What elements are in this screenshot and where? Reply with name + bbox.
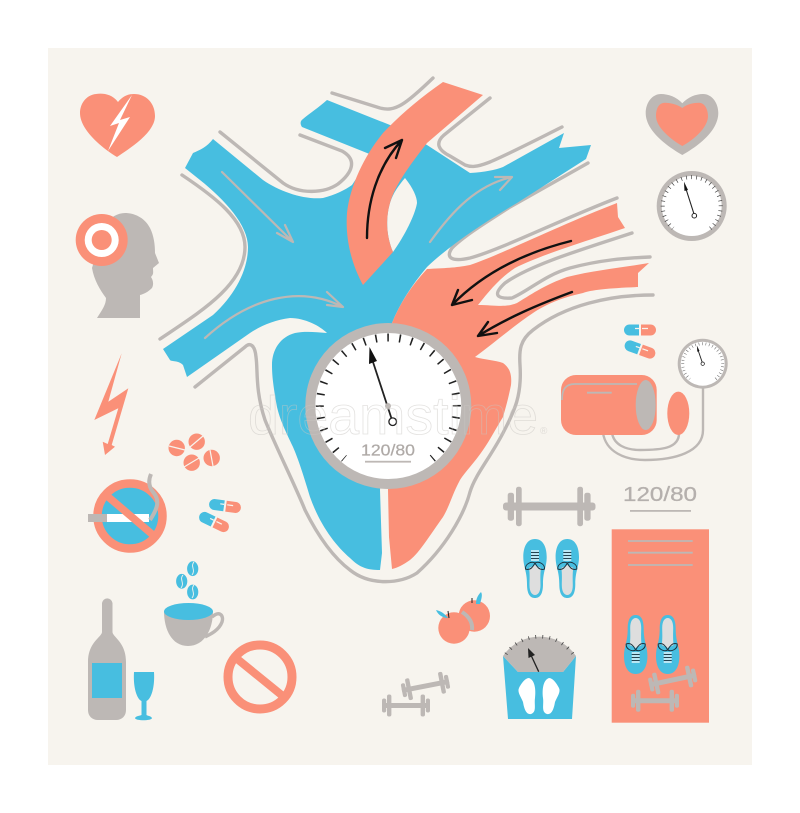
- icon: apples: [436, 592, 490, 644]
- heart diagram: [160, 78, 653, 582]
- icon: capsules right: [623, 324, 657, 360]
- watermark: dreamstime: [248, 386, 538, 446]
- icon: running shoes: [523, 539, 579, 598]
- icon: healthy heart: [646, 94, 718, 155]
- cuff gauge: [678, 339, 728, 389]
- icon: wine bottle: [88, 598, 126, 720]
- heading: 120/80 reading: [623, 484, 697, 512]
- pump bulb: [667, 392, 689, 435]
- icon: wine glass: [134, 672, 154, 720]
- icon: round pills: [168, 434, 220, 471]
- panel: orange exercise card: [612, 529, 709, 723]
- gauge needle: [369, 347, 397, 426]
- central pressure gauge: [305, 323, 471, 489]
- grey flow arrows: [205, 172, 512, 338]
- background panel: [48, 48, 752, 765]
- orange aortic arch: [347, 82, 483, 285]
- gauge reading: 120/80: [361, 442, 415, 460]
- icon: capsules left: [197, 498, 242, 534]
- footprints: [518, 678, 560, 714]
- icon: blood pressure cuff: [561, 339, 728, 460]
- black flow arrows: [367, 140, 572, 336]
- icon: no smoking: [88, 474, 162, 548]
- blue veins and right ventricle: [163, 100, 591, 570]
- icon: head with target: [76, 213, 159, 318]
- cuff tubes: [603, 385, 703, 460]
- icon: broken heart: [80, 94, 155, 157]
- gap under aortic arch: [387, 178, 417, 252]
- orange pulmonary veins and left ventricle: [388, 203, 649, 569]
- heading: 120/80 reading: 120/80: [623, 484, 697, 506]
- card dumbbells: [631, 664, 698, 712]
- icon: coffee beans: [176, 561, 198, 599]
- icon: large dumbbell: [503, 487, 596, 526]
- heart outline strokes: [160, 78, 653, 582]
- icon: coffee cup: [164, 603, 223, 646]
- watermark: ®: [540, 426, 548, 437]
- card shoes: [624, 615, 679, 674]
- icon: small dumbbells: [382, 671, 451, 716]
- icon: lightning bolt: [94, 353, 128, 455]
- icon: small gauge: [657, 171, 727, 241]
- icon: prohibition sign: [228, 645, 292, 709]
- icon: bathroom scale: [503, 637, 576, 719]
